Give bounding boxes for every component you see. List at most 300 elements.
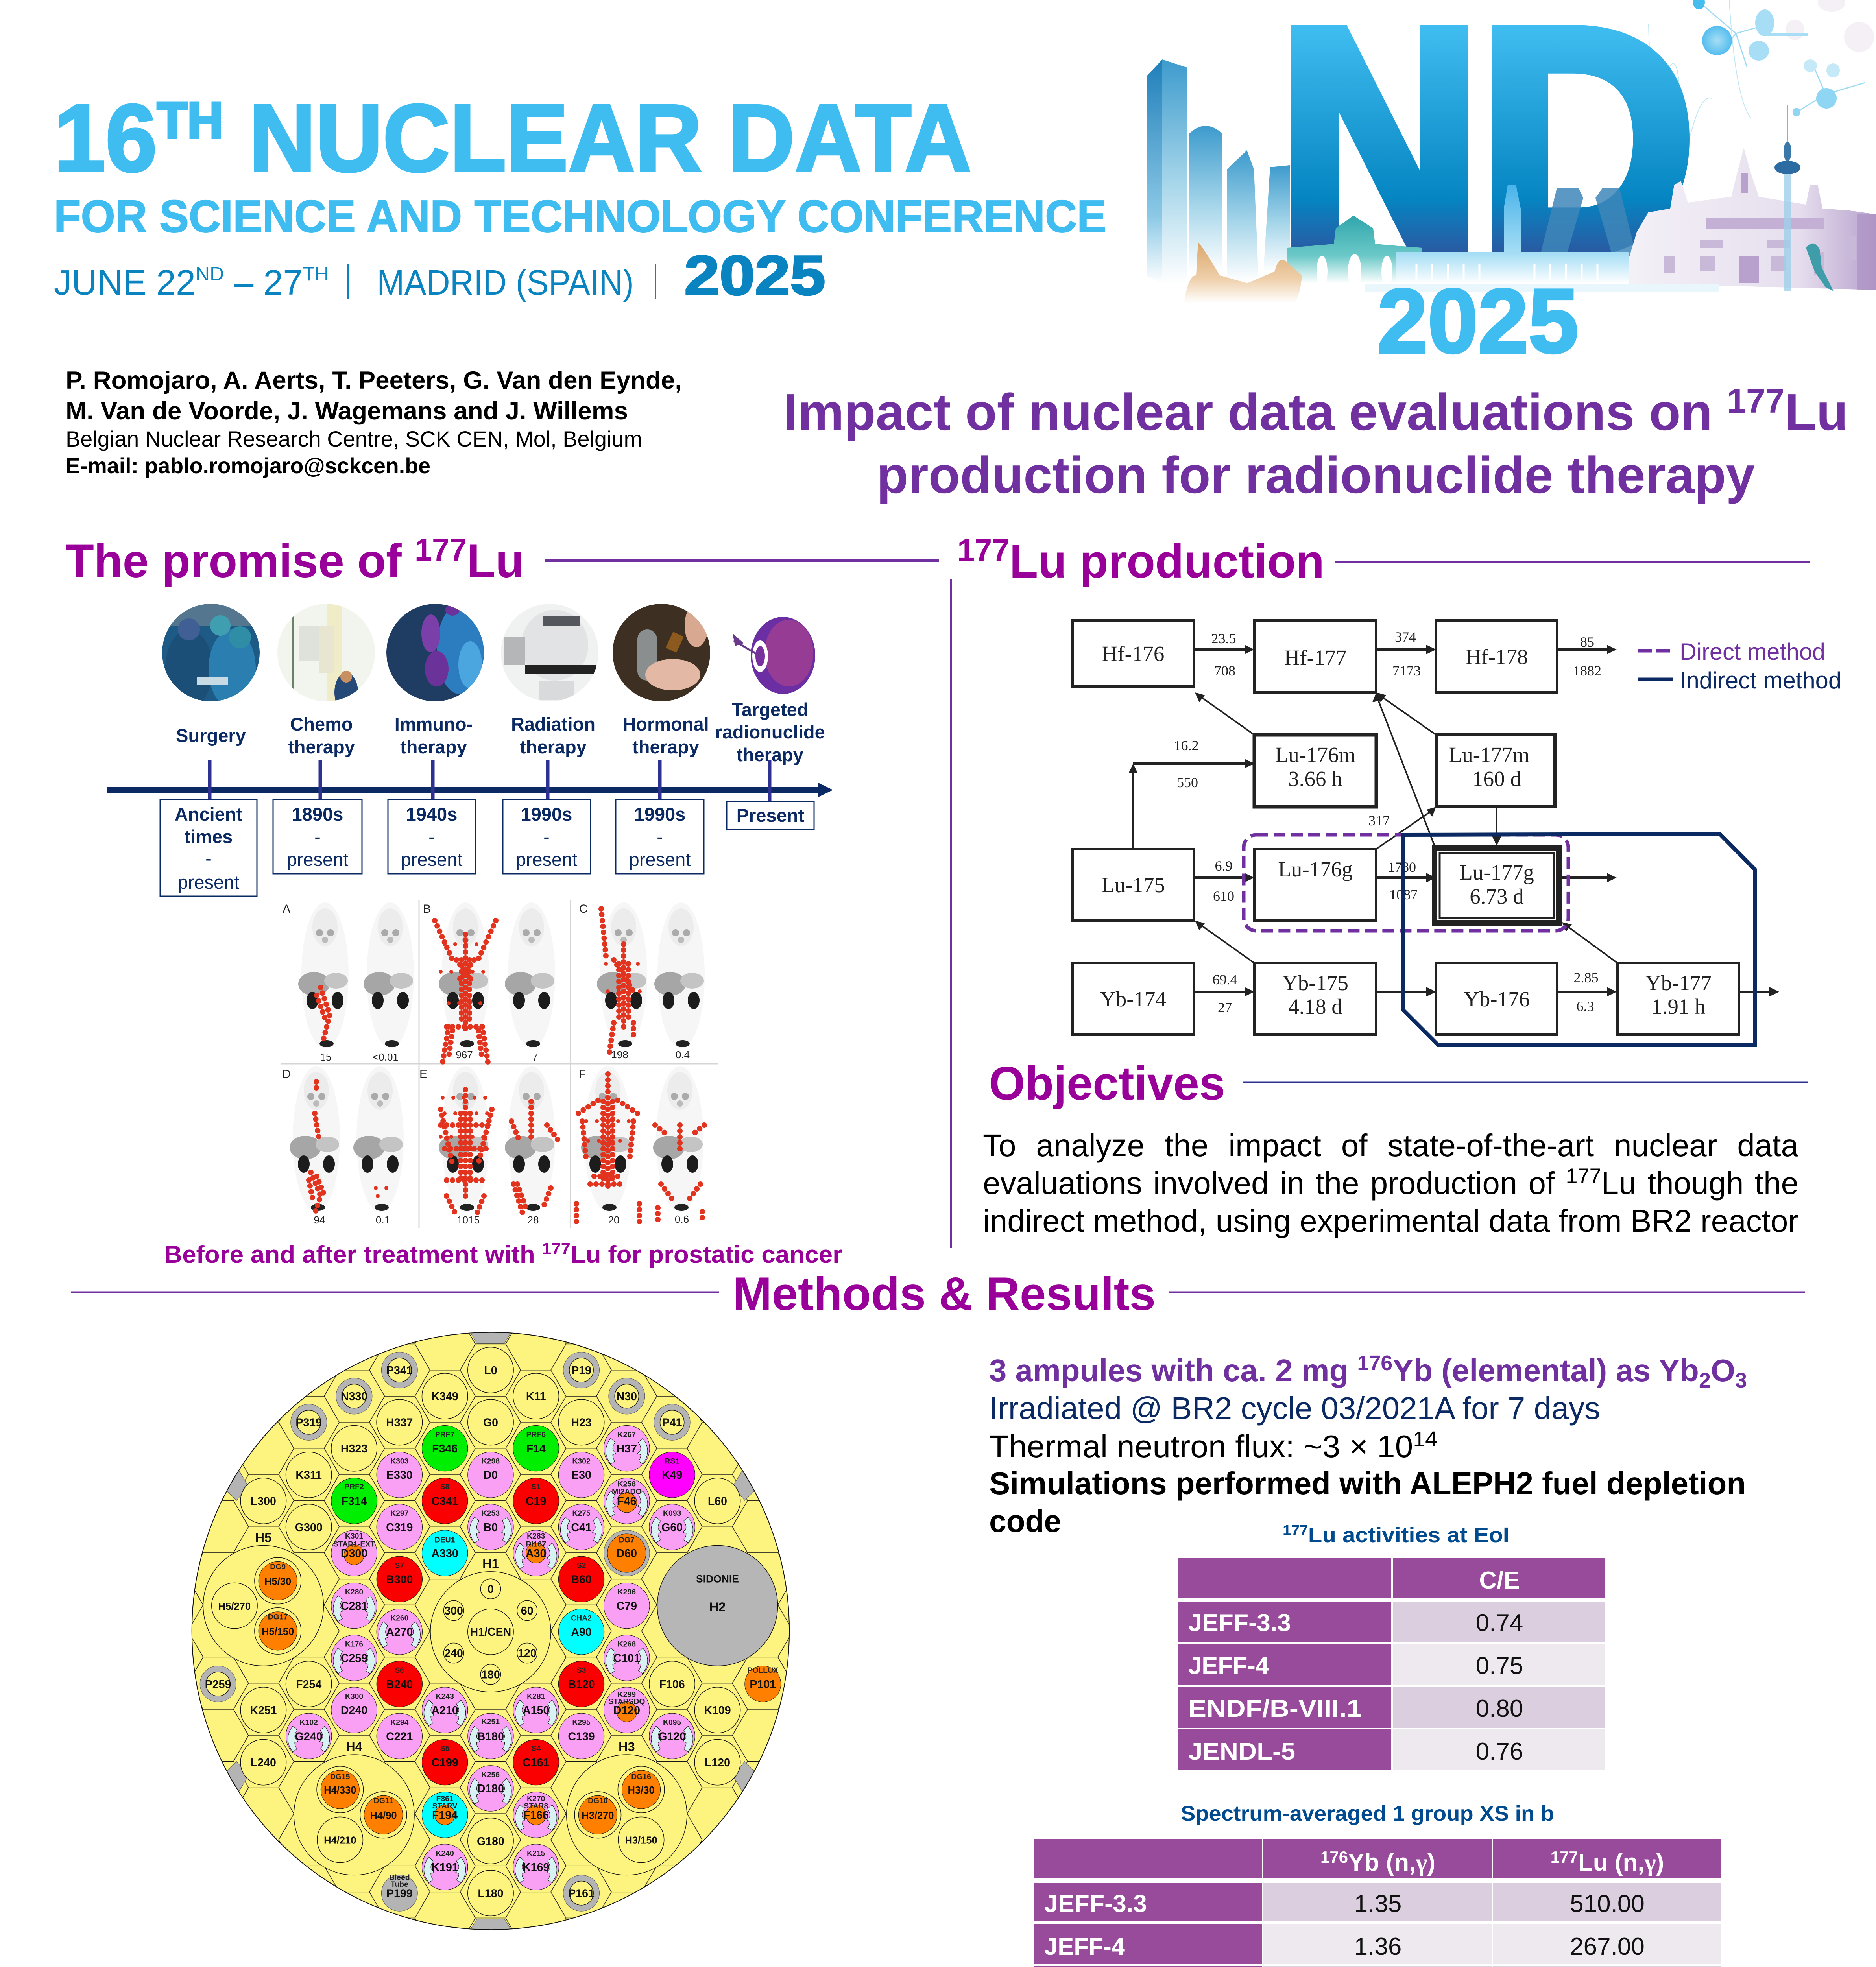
pink channels: K283 <box>527 1532 545 1541</box>
fuel channels: green, red, cyan, magenta, orange: S7 <box>395 1561 404 1570</box>
table 2: one-group cross sections: Lu (n, <box>1578 1849 1645 1876</box>
fuel channels: green, red, cyan, magenta, orange: B300 <box>386 1573 413 1586</box>
pink channels: D120 <box>613 1704 640 1717</box>
ring channels: P41 <box>662 1417 682 1429</box>
yellow channels: L300 <box>251 1495 276 1508</box>
yellow channels: L60 <box>708 1495 727 1508</box>
pink channels: K256 <box>482 1770 500 1779</box>
large channels H1 to H5: H5/30 <box>264 1576 291 1587</box>
telecom tower <box>1774 105 1800 291</box>
therapy labels: Chemo <box>290 714 353 734</box>
pink channels: K243 <box>436 1692 454 1701</box>
nuclide boxes: 160 d <box>1472 767 1521 791</box>
PET scans: before and after treatment: 7 <box>532 1051 538 1063</box>
panel E lesions <box>441 1090 492 1216</box>
date labels: - <box>314 826 321 847</box>
date: ND <box>196 263 224 285</box>
table 2: one-group cross sections: 1.35 <box>1354 1890 1401 1917</box>
pink channels: B0 <box>484 1521 498 1534</box>
pink channels: K300 <box>345 1692 363 1701</box>
fuel channels: green, red, cyan, magenta, orange: F314 <box>341 1495 367 1508</box>
date labels: 1940s <box>406 804 457 825</box>
authors block <box>66 367 682 478</box>
panel B lesions <box>435 921 496 1062</box>
section heading: 177Lu production <box>957 533 1810 588</box>
molecules <box>1649 0 1874 142</box>
fuel channels: green, red, cyan, magenta, orange <box>331 1425 695 1838</box>
links <box>1128 645 1779 996</box>
PET scans: before and after treatment: B <box>423 902 431 915</box>
large channels H1 to H5: DG17 <box>268 1613 288 1621</box>
fuel channels: green, red, cyan, magenta, orange: D60 <box>617 1547 637 1560</box>
date labels: 1990s <box>634 804 685 825</box>
large channels H1 to H5: H3/30 <box>628 1785 655 1796</box>
large channels H1 to H5: DG15 <box>330 1772 350 1781</box>
experiment description: 3 <box>1735 1369 1747 1392</box>
yellow channels: K109 <box>704 1704 731 1717</box>
authors block: P. Romojaro, A. Aerts, T. Peeters, G. Van den Eynde, <box>66 367 682 394</box>
nuclide boxes: Hf-178 <box>1466 645 1528 669</box>
ring channels: P319 <box>295 1417 322 1429</box>
nuclide boxes: Yb-176 <box>1464 987 1530 1011</box>
pink channels: K253 <box>482 1509 500 1518</box>
yellow channels: L120 <box>705 1757 730 1769</box>
fuel channels: green, red, cyan, magenta, orange: B120 <box>568 1678 595 1691</box>
therapy labels: Radiation <box>511 714 595 734</box>
date labels: Present <box>737 805 805 826</box>
table 2: one-group cross sections: 1.36 <box>1354 1933 1401 1960</box>
date labels: present <box>178 872 239 893</box>
nuclide boxes: Yb-175 <box>1282 971 1348 995</box>
pink channels: E330 <box>386 1469 413 1482</box>
pink channels: B180 <box>477 1730 504 1743</box>
PET scans: before and after treatment <box>281 900 718 1228</box>
large channels H1 to H5: H3 <box>619 1739 635 1754</box>
experiment description: Simulations performed with ALEPH2 fuel depletion <box>989 1466 1746 1501</box>
cross-section and half-life values: 550 <box>1177 775 1198 790</box>
conference logo: ND 2025 with Madrid skyline <box>1147 0 1876 372</box>
pink channels: G240 <box>295 1730 323 1743</box>
objectives text: To analyze the impact of state-of-the-art nuclear data <box>983 1128 1798 1163</box>
pink channels: K169 <box>523 1861 549 1874</box>
cross-section and half-life values: 85 <box>1580 634 1594 650</box>
reactor core map: BR2 <box>192 1332 789 1930</box>
poster title <box>783 381 1848 504</box>
table 1: 177Lu activities: 0.80 <box>1476 1695 1523 1722</box>
section heading: The promise of 177Lu: 177 <box>415 532 467 567</box>
authors block: E-mail: pablo.romojaro@sckcen.be <box>66 453 430 478</box>
fuel channels: green, red, cyan, magenta, orange: RS1 <box>665 1457 679 1465</box>
yellow channels: K11 <box>526 1390 546 1403</box>
pink channels: K191 <box>431 1861 458 1874</box>
legend <box>1638 638 1841 694</box>
section heading: Methods & Results: Methods & Results <box>733 1268 1156 1320</box>
large channels H1 to H5: H5/270 <box>218 1601 251 1612</box>
large channels H1 to H5: 180 <box>481 1668 500 1681</box>
experiment description: O <box>1711 1353 1735 1388</box>
table 1: 177Lu activities: 0.75 <box>1476 1652 1523 1679</box>
pink channels: D300 <box>341 1547 367 1560</box>
cross-section and half-life values: 317 <box>1368 813 1390 829</box>
pink channels: C41 <box>571 1521 592 1534</box>
poster title: production for radionuclide therapy <box>877 446 1755 504</box>
objectives text: evaluations involved in the production of 177Lu though the <box>983 1164 1798 1201</box>
photo: hormonal therapy <box>613 604 716 708</box>
large channels H1 to H5: 120 <box>518 1647 537 1660</box>
pink channels: K295 <box>572 1718 591 1727</box>
fuel channels: green, red, cyan, magenta, orange: F14 <box>526 1443 546 1455</box>
pink channels: C101 <box>613 1652 640 1664</box>
section heading: The promise of 177Lu: Lu <box>467 535 524 587</box>
photo: surgery <box>161 602 260 708</box>
date: TH <box>303 263 329 285</box>
fuel channels: green, red, cyan, magenta, orange: A330 <box>431 1547 458 1560</box>
large channels H1 to H5 <box>203 1530 778 1875</box>
yellow channels: K311 <box>295 1469 322 1482</box>
yellow channels: G0 <box>483 1417 498 1429</box>
pink channels: D240 <box>341 1704 367 1717</box>
pink channels: K251 <box>482 1718 500 1726</box>
yellow channels: K251 <box>250 1704 277 1717</box>
large channels H1 to H5: H3/270 <box>582 1810 614 1821</box>
fuel channels: green, red, cyan, magenta, orange: S4 <box>531 1744 541 1753</box>
large channels H1 to H5: 0 <box>487 1583 494 1596</box>
date labels: - <box>205 848 212 869</box>
nuclide boxes: 3.66 h <box>1288 767 1342 791</box>
table 2: one-group cross sections: 267.00 <box>1570 1933 1645 1960</box>
yellow channels <box>240 1347 740 1916</box>
big letters N and D <box>1278 0 1696 317</box>
fuel channels: green, red, cyan, magenta, orange: A90 <box>571 1626 592 1639</box>
pink channels: K095 <box>663 1718 681 1727</box>
large channels H1 to H5: H3/150 <box>625 1835 657 1846</box>
heading: 16th Nuclear Data: NUCLEAR DATA <box>223 85 971 192</box>
table 2: one-group cross sections: 177 <box>1551 1848 1578 1866</box>
pink channels: STAR1-EXT <box>333 1540 375 1549</box>
date labels: 1890s <box>292 804 343 825</box>
large channels H1 to H5: H4/330 <box>324 1785 356 1796</box>
section heading: The promise of 177Lu: The promise of <box>65 535 404 587</box>
PET scans: before and after treatment: 0.1 <box>376 1214 390 1226</box>
nuclide boxes: Hf-177 <box>1284 646 1346 670</box>
palace <box>1621 148 1876 290</box>
PET scans: before and after treatment: 94 <box>314 1214 325 1226</box>
fuel channels: green, red, cyan, magenta, orange: F194 <box>432 1809 458 1821</box>
pink channels: D180 <box>477 1782 504 1795</box>
pink channels: A210 <box>431 1704 458 1717</box>
fuel channels: green, red, cyan, magenta, orange: S8 <box>440 1483 450 1491</box>
panel A lesions <box>317 987 330 1043</box>
KIO tower left <box>1540 188 1583 256</box>
therapy labels: therapy <box>520 736 587 757</box>
ring channels: P199 <box>386 1887 413 1900</box>
fuel channels: green, red, cyan, magenta, orange: DG7 <box>619 1535 635 1544</box>
section heading: Objectives: Objectives <box>989 1057 1225 1110</box>
panel D right lesions <box>376 1188 388 1196</box>
table 1: 177Lu activities: JEFF-3.3 <box>1188 1609 1291 1637</box>
experiment description: Thermal neutron flux: ~3 × 10 <box>989 1429 1402 1464</box>
table 1: 177Lu activities: 0.76 <box>1476 1738 1523 1765</box>
ring channels: P259 <box>205 1678 231 1691</box>
cross-section and half-life values: 708 <box>1214 663 1235 679</box>
nuclide boxes: 4.18 d <box>1288 995 1342 1019</box>
PET scans: before and after treatment: 1015 <box>457 1214 480 1226</box>
fuel channels: green, red, cyan, magenta, orange: B60 <box>571 1573 592 1586</box>
pink channels: F166 <box>523 1809 549 1821</box>
therapy labels: therapy <box>288 736 355 757</box>
fuel channels: green, red, cyan, magenta, orange: PRF2 <box>344 1483 364 1491</box>
scan caption: Lu for prostatic cancer <box>571 1241 842 1268</box>
fuel channels: green, red, cyan, magenta, orange: K49 <box>662 1469 682 1482</box>
nuclide boxes: 6.73 d <box>1470 884 1524 908</box>
subheading: for science and technology conference: FOR SCIENCE AND TECHNOLOGY CONFERENCE <box>54 191 1106 242</box>
table 1: 177Lu activities: ENDF/B-VIII.1 <box>1188 1695 1362 1722</box>
yellow channels: L0 <box>484 1364 497 1377</box>
nuclide boxes: 1.91 h <box>1651 995 1706 1019</box>
poster title: 177 <box>1727 381 1785 420</box>
yellow channels: H323 <box>341 1443 367 1455</box>
pink channels: K240 <box>436 1849 454 1858</box>
PET scans: before and after treatment: <0.01 <box>373 1051 399 1063</box>
pink channels: K102 <box>300 1718 318 1727</box>
table 1: 177Lu activities: JENDL-5 <box>1188 1738 1295 1765</box>
fuel channels: green, red, cyan, magenta, orange: F861 <box>436 1795 454 1803</box>
year: 2025 <box>684 244 825 307</box>
panel E right lesions <box>511 1102 559 1216</box>
pink channels: G120 <box>658 1730 686 1743</box>
cross-section and half-life values: 1780 <box>1388 859 1416 875</box>
experiment description: 176 <box>1357 1351 1392 1375</box>
nuclide boxes: Hf-176 <box>1102 642 1164 666</box>
large channels H1 to H5: H5 <box>255 1530 271 1544</box>
yellow channels: F106 <box>659 1678 685 1691</box>
nuclide boxes: Yb-174 <box>1100 987 1166 1011</box>
yellow channels: K349 <box>431 1390 458 1403</box>
date labels: present <box>629 849 691 870</box>
fuel channels: green, red, cyan, magenta, orange: S2 <box>577 1561 586 1570</box>
table 2: one-group cross sections: JEFF-4 <box>1044 1933 1125 1960</box>
table 2: one-group cross sections: γ) <box>1645 1849 1664 1876</box>
fuel channels: green, red, cyan, magenta, orange: C19 <box>526 1495 546 1508</box>
cross-section and half-life values: 6.3 <box>1576 998 1594 1014</box>
pink channels: C319 <box>386 1521 413 1534</box>
pink channels: K275 <box>572 1509 591 1518</box>
section heading: 177Lu production: Lu production <box>1009 535 1324 588</box>
indirect method outline <box>1403 834 1755 1045</box>
date boxes <box>160 799 814 896</box>
date labels: times <box>185 826 233 847</box>
ring channels: P19 <box>571 1364 591 1377</box>
gate <box>1287 216 1422 289</box>
nuclide boxes: Lu-176m <box>1275 743 1355 767</box>
poster title: Impact of nuclear data evaluations on <box>783 383 1713 441</box>
cross-section and half-life values: 1882 <box>1573 663 1601 679</box>
experiment description: code <box>989 1504 1061 1539</box>
date labels: present <box>401 849 462 870</box>
pink channels: E30 <box>571 1469 591 1482</box>
PET scans: before and after treatment: 28 <box>528 1214 539 1226</box>
panel C lesions <box>601 909 643 1054</box>
pink channels: RI167 <box>526 1540 546 1549</box>
table 2: one-group cross sections: γ) <box>1416 1849 1435 1876</box>
experiment description: Irradiated @ BR2 cycle 03/2021A for 7 days <box>989 1391 1600 1426</box>
large channels H1 to H5: 240 <box>444 1647 463 1660</box>
large channels H1 to H5: H4/90 <box>370 1810 397 1821</box>
fuel channels: green, red, cyan, magenta, orange: PRF7 <box>435 1430 454 1439</box>
heading: 16th Nuclear Data: 16 <box>54 85 160 192</box>
cross-section and half-life values: 2.85 <box>1574 970 1598 985</box>
PET scans: before and after treatment: C <box>579 902 588 915</box>
PET scans: before and after treatment: E <box>419 1068 427 1081</box>
pink channels: A270 <box>386 1626 413 1639</box>
pink channels: G60 <box>661 1521 683 1534</box>
date: – 27 <box>224 263 303 303</box>
pink channels: C79 <box>617 1600 637 1613</box>
pink channels: K303 <box>390 1457 409 1465</box>
cross-section and half-life values: 374 <box>1395 629 1416 645</box>
nuclide boxes: Lu-176g <box>1278 857 1353 881</box>
table 2: one-group cross sections: 510.00 <box>1570 1890 1645 1917</box>
ring channels <box>200 1352 781 1911</box>
date labels: Ancient <box>175 804 243 825</box>
large channels H1 to H5: DG10 <box>588 1797 608 1805</box>
therapy labels <box>176 699 825 765</box>
photo: chemotherapy <box>277 604 375 701</box>
therapy labels: Hormonal <box>622 714 709 734</box>
divider between upper columns <box>950 579 952 1248</box>
pink channels <box>286 1425 695 1890</box>
nuclide boxes: Yb-177 <box>1645 971 1712 995</box>
pink channels: F46 <box>617 1495 636 1508</box>
PET scans: before and after treatment: F <box>579 1068 586 1081</box>
nuclide boxes: Lu-177m <box>1449 743 1529 767</box>
objectives text <box>983 1127 1798 1240</box>
pink channels: K294 <box>390 1718 409 1727</box>
cross-section and half-life values: 7173 <box>1392 663 1421 679</box>
table 1: 177Lu activities: 0.74 <box>1476 1609 1523 1637</box>
large channels H1 to H5: 60 <box>521 1605 534 1617</box>
cross-section and half-life values: 1087 <box>1389 887 1418 902</box>
pink channels: K297 <box>390 1509 408 1518</box>
PET scans: before and after treatment: 0.6 <box>675 1213 689 1225</box>
date labels <box>175 804 805 893</box>
fuel channels: green, red, cyan, magenta, orange: C199 <box>431 1757 458 1769</box>
objectives text: indirect method, using experimental data from BR2 reactor <box>983 1203 1798 1238</box>
pink channels: C259 <box>341 1652 367 1664</box>
fuel channels: green, red, cyan, magenta, orange: S1 <box>531 1483 541 1491</box>
towers <box>1147 59 1290 284</box>
colonnade and monument <box>1396 185 1629 284</box>
therapy labels: Surgery <box>176 725 246 746</box>
nuclide boxes: Lu-175 <box>1101 873 1165 897</box>
panel D lesions <box>309 1082 325 1214</box>
large channels H1 to H5: SIDONIE <box>696 1573 739 1585</box>
ring channels: P101 <box>750 1678 776 1691</box>
fuel channels: green, red, cyan, magenta, orange: S3 <box>577 1666 586 1675</box>
pink channels: K301 <box>345 1532 363 1541</box>
yellow channels: G180 <box>477 1835 504 1848</box>
scan caption: 177 <box>542 1239 571 1258</box>
table 1: 177Lu activities: C/E <box>1479 1567 1520 1594</box>
ring channels: P341 <box>386 1364 413 1377</box>
fuel channels: green, red, cyan, magenta, orange: CHA2 <box>571 1614 592 1622</box>
large channels H1 to H5: H4 <box>346 1739 362 1754</box>
pink channels: K258 <box>618 1480 636 1489</box>
yellow channels: H23 <box>571 1417 592 1429</box>
panel F right lesions <box>655 1125 704 1223</box>
large channels H1 to H5: H1/CEN <box>470 1626 511 1639</box>
yellow channels: L180 <box>478 1887 503 1900</box>
pink channels: K267 <box>618 1430 636 1439</box>
yellow channels: G300 <box>295 1521 323 1534</box>
rim reflector pieces <box>224 1332 757 1930</box>
cross-section and half-life values: 16.2 <box>1174 738 1198 753</box>
large channels H1 to H5: H1 <box>482 1556 499 1571</box>
experiment description: 2 <box>1699 1369 1711 1392</box>
header: conference title <box>54 85 1106 307</box>
date labels: 1990s <box>521 804 572 825</box>
table 1: 177Lu activities <box>1178 1558 1605 1770</box>
location: MADRID (SPAIN) <box>377 263 634 303</box>
large channels H1 to H5: DG16 <box>631 1772 651 1781</box>
authors block: M. Van de Voorde, J. Wagemans and J. Willems <box>66 397 628 425</box>
pink channels: K268 <box>618 1640 636 1649</box>
large channels H1 to H5: H5/150 <box>262 1626 294 1637</box>
pink channels: MI2ADO <box>612 1487 642 1496</box>
table 2: one-group cross sections: Yb (n, <box>1348 1849 1416 1876</box>
table 2 title: Spectrum-averaged 1 group XS in b <box>1181 1802 1554 1825</box>
pink channels: A30 <box>526 1547 546 1560</box>
legend: Direct method <box>1680 638 1825 665</box>
fuel channels: green, red, cyan, magenta, orange: B240 <box>386 1678 413 1691</box>
date labels: - <box>543 826 550 847</box>
photo: radiation therapy <box>501 604 598 701</box>
pink channels: C281 <box>341 1600 367 1613</box>
pink channels: C139 <box>568 1730 595 1743</box>
cross-section and half-life values: 610 <box>1213 888 1234 904</box>
ring channels: N30 <box>617 1390 637 1403</box>
authors block: Belgian Nuclear Research Centre, SCK CEN, Mol, Belgium <box>66 426 642 451</box>
poster title: Lu <box>1785 383 1848 441</box>
table 2: one-group cross sections: 176 <box>1320 1848 1348 1866</box>
nuclide boxes: Lu-177g <box>1459 860 1534 884</box>
pink channels: K280 <box>345 1588 363 1596</box>
pink channels: D0 <box>484 1469 498 1482</box>
KIO tower right <box>1595 188 1636 256</box>
pink channels: K215 <box>527 1849 545 1858</box>
pink channels: K298 <box>482 1457 500 1465</box>
direct method outline <box>1244 835 1568 931</box>
pink channels: K302 <box>572 1457 591 1465</box>
date labels: present <box>516 849 577 870</box>
pink channels: K281 <box>527 1692 545 1701</box>
experiment description: 14 <box>1413 1427 1437 1451</box>
pink channels: C221 <box>386 1730 413 1743</box>
section heading: The promise of 177Lu <box>65 532 939 587</box>
therapy labels: Targeted <box>732 699 808 720</box>
ring channels: P161 <box>568 1887 595 1900</box>
pink channels: A150 <box>523 1704 549 1717</box>
cross-section and half-life values: 69.4 <box>1213 972 1237 987</box>
pink channels: STARSDQ <box>608 1698 645 1706</box>
logo year 2025: 2025 <box>1377 270 1579 372</box>
pink channels: H37 <box>617 1443 637 1455</box>
cross-section and half-life values: 27 <box>1218 1000 1232 1015</box>
yellow channels: L240 <box>251 1757 276 1769</box>
PET scans: before and after treatment: D <box>282 1068 291 1081</box>
fuel channels: green, red, cyan, magenta, orange: STARV <box>432 1802 458 1810</box>
timeline arrow <box>107 760 833 801</box>
